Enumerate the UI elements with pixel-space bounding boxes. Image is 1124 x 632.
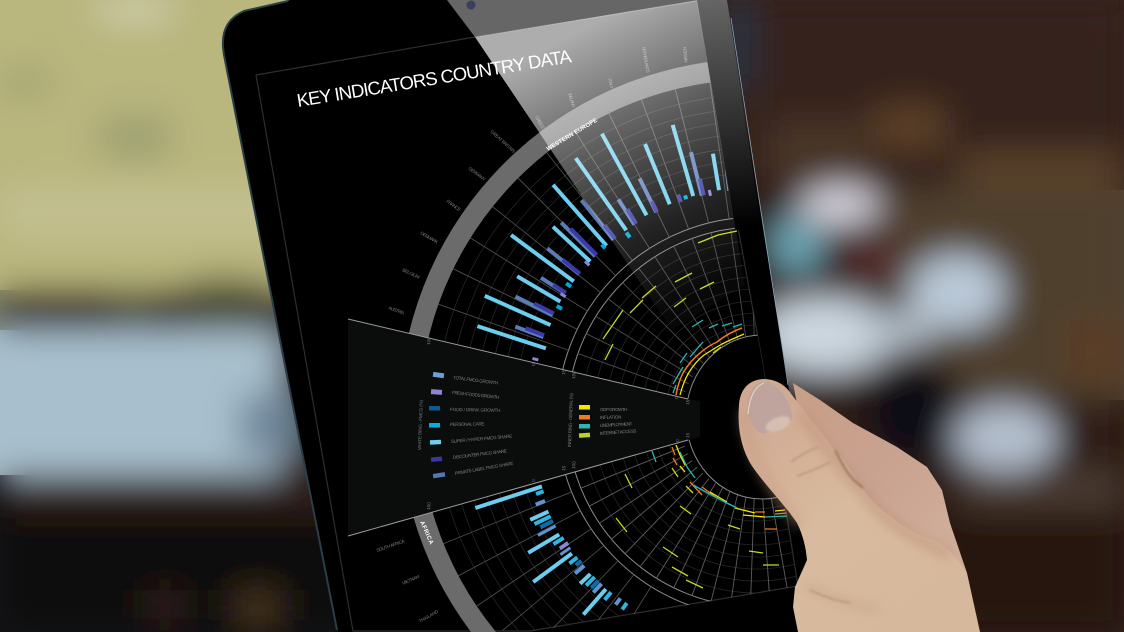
country labels: BELGIUM — [402, 267, 421, 280]
title: KEY INDICATORS COUNTRY DATA — [295, 45, 574, 111]
axis captions and ticks: INNER RING - GENERAL (%) — [567, 392, 574, 447]
axis captions and ticks: 0 — [531, 363, 536, 366]
region labels: WESTERN EUROPE — [546, 118, 599, 153]
legend panel — [348, 319, 700, 536]
thumb and palm — [739, 379, 980, 632]
nail lunula — [764, 413, 792, 435]
legend: inner ring: GDP GROWTH — [600, 407, 628, 412]
axis captions and ticks: 100 — [426, 337, 432, 345]
radial spokes — [438, 82, 790, 631]
bars: africa and asia — [475, 485, 628, 616]
country labels: GERMANY — [467, 166, 487, 182]
fan chart — [348, 47, 796, 632]
region ring band — [409, 62, 711, 632]
axis captions and ticks: 0 — [531, 479, 536, 482]
country labels: NORWAY — [682, 47, 688, 64]
bars: western europe — [477, 124, 731, 361]
legend: white ring: PRIVATE LABEL FMCG SHARE — [454, 461, 514, 476]
legend: inner ring: UNEMPLOYMENT — [600, 421, 633, 428]
legend: white ring: PERSONAL CARE — [450, 421, 485, 427]
axis captions and ticks: 15 — [561, 369, 566, 375]
finger crease — [835, 450, 863, 488]
country labels: AUSTRIA — [388, 305, 406, 316]
axis captions and ticks: 100 — [426, 502, 432, 510]
country labels: DENMARK — [420, 231, 440, 245]
country labels: SOUTH AFRICA — [376, 538, 406, 553]
hand holding tablet — [739, 379, 980, 632]
country labels: GREECE — [534, 115, 546, 130]
legend: white ring: FRESH FOODS GROWTH — [452, 390, 500, 400]
country labels: THAILAND — [418, 608, 440, 624]
legend: inner ring: INTERNET ACCESS — [600, 428, 637, 436]
country labels: VIETNAM — [401, 574, 421, 586]
grid arcs — [444, 97, 796, 631]
axis captions and ticks: 100 — [571, 461, 577, 469]
country labels: NETHERLANDS — [641, 46, 651, 74]
inner ring lines: upper — [603, 231, 744, 395]
legend: white ring: DISCOUNTER FMCG SHARE — [453, 448, 508, 460]
inner hole — [688, 334, 778, 500]
inner ring lines: lower — [616, 445, 787, 588]
country labels: ITALY — [607, 78, 615, 90]
right rim highlight — [731, 18, 788, 385]
tablet rim — [223, 1, 337, 630]
country labels: GREAT BRITAIN — [489, 129, 516, 154]
screen frame — [256, 1, 798, 631]
legend: inner ring — [579, 405, 637, 438]
legend: white ring: SUPER / HYPER FMCG SHARE — [451, 434, 513, 444]
region labels: AFRICA — [418, 520, 434, 546]
axis captions and ticks: 15 — [685, 399, 690, 405]
country labels — [376, 46, 688, 624]
legend: white ring: TOTAL FMCG GROWTH — [453, 375, 499, 386]
nail rim — [748, 383, 764, 414]
legend: white ring: FOOD / DRINK GROWTH — [450, 407, 501, 413]
thumb knuckle creases — [791, 447, 850, 603]
country labels: IRELAND — [567, 93, 576, 109]
legend: inner ring: INFLATION — [600, 415, 622, 420]
axis captions and ticks: 0 — [674, 396, 679, 399]
legend: white ring — [429, 372, 514, 478]
region labels — [418, 118, 599, 546]
country labels: FRANCE — [445, 199, 462, 213]
axis captions and ticks: 15 — [685, 432, 690, 438]
axis captions and ticks: 100 — [571, 371, 577, 379]
glass glare — [447, 0, 762, 330]
axis captions and ticks: 15 — [561, 465, 566, 471]
tablet body — [223, 0, 826, 632]
axis captions and ticks: 0 — [675, 439, 680, 442]
skin shading — [745, 410, 950, 610]
fingers — [793, 383, 967, 573]
axis captions and ticks — [417, 337, 690, 510]
axis captions and ticks: WHITE RING - FMCG (%) — [417, 399, 424, 450]
thumb nail — [747, 382, 792, 434]
